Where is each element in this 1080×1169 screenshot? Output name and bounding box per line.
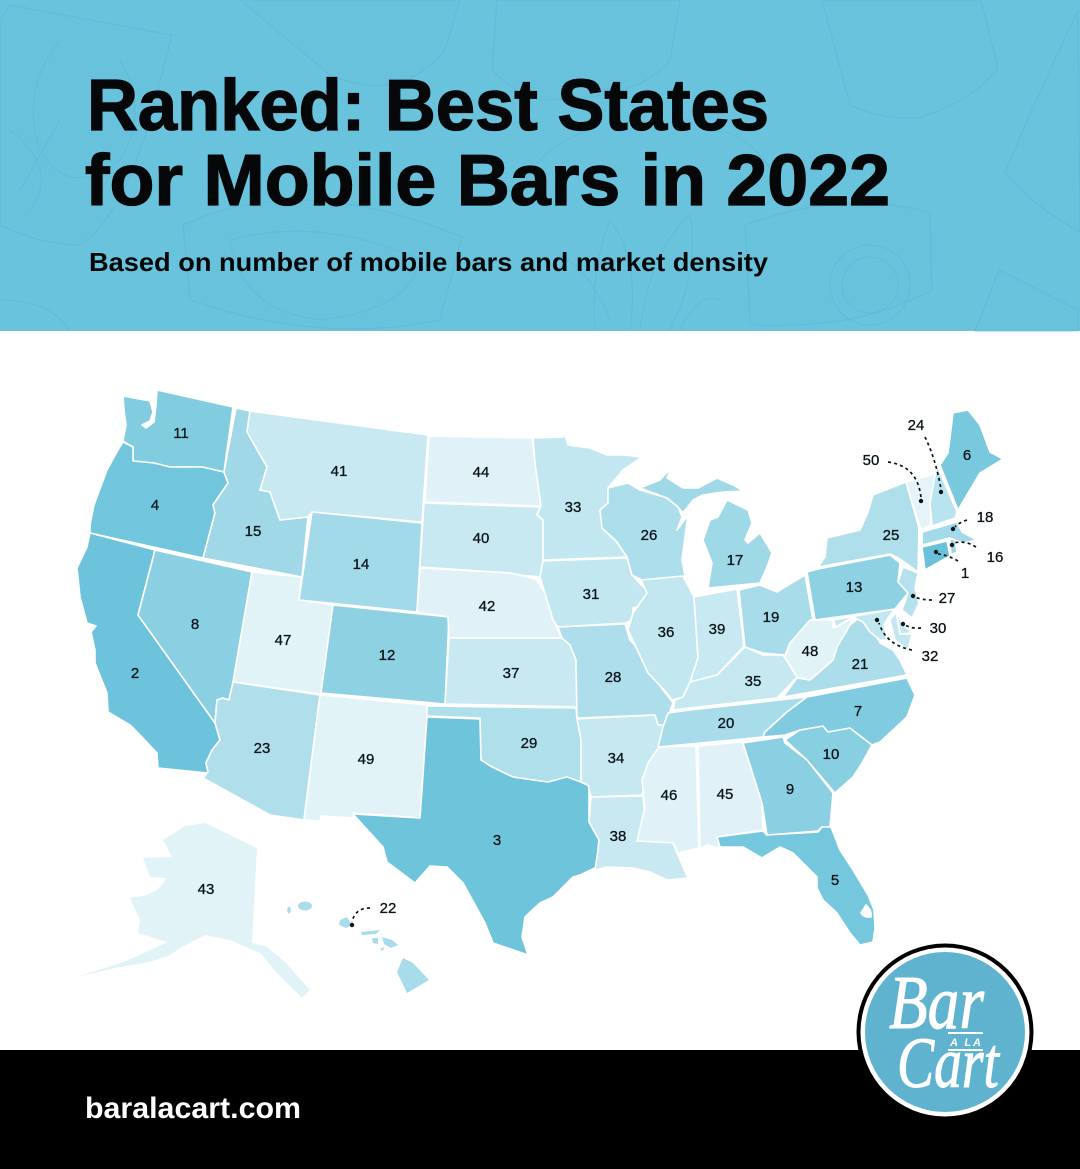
state: Tennessee, rank 20: 20: [718, 715, 734, 732]
state: Wisconsin, rank 26: [600, 483, 688, 580]
state: Wyoming, rank 14: [299, 512, 422, 612]
state: Utah, rank 47: [233, 572, 333, 694]
subtitle: Based on number of mobile bars and market density: [89, 247, 769, 277]
state: Utah, rank 47: 47: [275, 632, 291, 649]
state: Washington, rank 11: [123, 390, 233, 472]
state: Louisiana, rank 38: 38: [610, 828, 626, 845]
state: Kentucky, rank 35: [673, 647, 797, 710]
state: Idaho, rank 15: 15: [245, 523, 261, 540]
state: Missouri, rank 28: [558, 624, 673, 725]
state: Ohio, rank 19: 19: [763, 609, 779, 626]
state: Vermont, rank 50: 50: [863, 452, 879, 469]
state: Georgia, rank 9: [743, 737, 833, 835]
state: New Hampshire, rank 24: 24: [908, 417, 924, 434]
state: Nevada, rank 8: 8: [191, 616, 199, 633]
state: Maryland, rank 32: [833, 609, 938, 665]
state: New York, rank 25: [818, 482, 940, 578]
logo: Bar a la Cart: Bar: [889, 961, 984, 1045]
title: [85, 66, 890, 221]
state: Pennsylvania, rank 13: [807, 555, 908, 620]
state: Virginia, rank 21: [783, 617, 907, 697]
state: Delaware, rank 30: 30: [930, 620, 946, 637]
state: Nevada, rank 8: [138, 550, 252, 723]
state: California, rank 2: [77, 533, 220, 773]
state: Texas, rank 3: 3: [493, 832, 501, 849]
state: New Hampshire, rank 24: [908, 417, 957, 526]
state: Minnesota, rank 33: [533, 432, 642, 560]
state: Mississippi, rank 46: 46: [661, 787, 677, 804]
state: New Mexico, rank 49: [304, 695, 428, 821]
state: North Carolina, rank 7: 7: [854, 703, 862, 720]
state: Arkansas, rank 34: [577, 715, 665, 797]
state: Oklahoma, rank 29: 29: [521, 735, 537, 752]
state: Mississippi, rank 46: [637, 746, 699, 853]
state: South Dakota, rank 40: [420, 503, 543, 577]
state: Oregon, rank 4: [90, 442, 228, 558]
state: North Carolina, rank 7: [763, 678, 915, 745]
state: Rhode Island, rank 16: 16: [987, 549, 1003, 566]
state: Louisiana, rank 38: [589, 796, 688, 880]
state: Montana, rank 41: 41: [331, 463, 347, 480]
state: Alaska, rank 43: 43: [198, 881, 214, 898]
state: Hawaii, rank 22: 22: [380, 900, 396, 917]
state: South Dakota, rank 40: 40: [473, 530, 489, 547]
state: Oregon, rank 4: 4: [151, 497, 159, 514]
state: Arizona, rank 23: [203, 682, 320, 820]
logo: Bar a la Cart: Cart: [897, 1023, 1001, 1103]
state: Minnesota, rank 33: 33: [565, 499, 581, 516]
state: West Virginia, rank 48: 48: [802, 643, 818, 660]
state: New Jersey, rank 27: 27: [939, 590, 955, 607]
state: West Virginia, rank 48: [785, 615, 853, 680]
footer url: baralacart.com: [85, 1092, 301, 1125]
state: Nebraska, rank 42: [417, 568, 562, 638]
state: Tennessee, rank 20: [658, 697, 807, 747]
state: Oklahoma, rank 29: [427, 706, 581, 782]
state: Iowa, rank 31: 31: [583, 586, 599, 603]
state: Pennsylvania, rank 13: 13: [846, 579, 862, 596]
state: Illinois, rank 36: [628, 576, 698, 700]
state: Florida, rank 5: 5: [831, 872, 839, 889]
state: Indiana, rank 39: 39: [709, 621, 725, 638]
state: Alaska, rank 43: [77, 823, 310, 998]
state: Kansas, rank 37: [445, 638, 577, 707]
state: New Mexico, rank 49: 49: [358, 751, 374, 768]
state: Nebraska, rank 42: 42: [479, 598, 495, 615]
state: Indiana, rank 39: [690, 589, 744, 682]
footer bar: [0, 1050, 1080, 1169]
state: Colorado, rank 12: 12: [379, 647, 395, 664]
state: Iowa, rank 31: [540, 558, 648, 627]
state: North Dakota, rank 44: 44: [473, 464, 489, 481]
state: Colorado, rank 12: [321, 605, 449, 704]
state: Maine, rank 6: [940, 410, 1003, 510]
state: New Jersey, rank 27: [898, 567, 955, 618]
state: Montana, rank 41: [247, 411, 428, 522]
state: Arkansas, rank 34: 34: [608, 750, 624, 767]
title: for Mobile Bars in 2022: [85, 141, 890, 221]
state: Kansas, rank 37: 37: [503, 665, 519, 682]
state: Massachusetts, rank 18: [922, 509, 993, 545]
header banner: [0, 0, 1080, 331]
state: Illinois, rank 36: 36: [658, 624, 674, 641]
state: Kentucky, rank 35: 35: [745, 673, 761, 690]
state: Wyoming, rank 14: 14: [353, 556, 369, 573]
state: Michigan, rank 17: 17: [727, 552, 743, 569]
state: Connecticut, rank 1: [922, 541, 969, 582]
state: Michigan, rank 17: [640, 467, 772, 588]
state: Massachusetts, rank 18: 18: [977, 509, 993, 526]
state: Virginia, rank 21: 21: [852, 656, 868, 673]
state: Vermont, rank 50: [863, 452, 935, 530]
state: Alabama, rank 45: 45: [717, 786, 733, 803]
state: Maine, rank 6: 6: [963, 447, 971, 464]
state: Hawaii, rank 22: [287, 900, 429, 993]
state: Rhode Island, rank 16: [950, 539, 1003, 566]
logo: Bar a la Cart: A LA: [949, 1037, 981, 1049]
state: California, rank 2: 2: [131, 665, 139, 682]
state: Alabama, rank 45: [698, 742, 763, 849]
state: Arizona, rank 23: 23: [254, 740, 270, 757]
logo: Bar a la Cart: [856, 944, 1034, 1120]
state: Connecticut, rank 1: 1: [961, 565, 969, 582]
state: Florida, rank 5: [717, 827, 875, 945]
state: Maryland, rank 32: 32: [922, 648, 938, 665]
state: Delaware, rank 30: [896, 609, 946, 637]
state: Ohio, rank 19: [739, 575, 813, 655]
state: North Dakota, rank 44: [425, 436, 541, 506]
US map: [77, 390, 1003, 998]
state: Idaho, rank 15: [203, 408, 308, 577]
state: South Carolina, rank 10: 10: [823, 746, 839, 763]
state: New York, rank 25: 25: [883, 527, 899, 544]
state: Texas, rank 3: [353, 717, 599, 955]
state: Georgia, rank 9: 9: [786, 781, 794, 798]
state: Washington, rank 11: 11: [173, 425, 189, 442]
state: South Carolina, rank 10: [785, 726, 872, 793]
state: Wisconsin, rank 26: 26: [641, 527, 657, 544]
state: Missouri, rank 28: 28: [605, 669, 621, 686]
title: Ranked: Best States: [87, 66, 769, 146]
